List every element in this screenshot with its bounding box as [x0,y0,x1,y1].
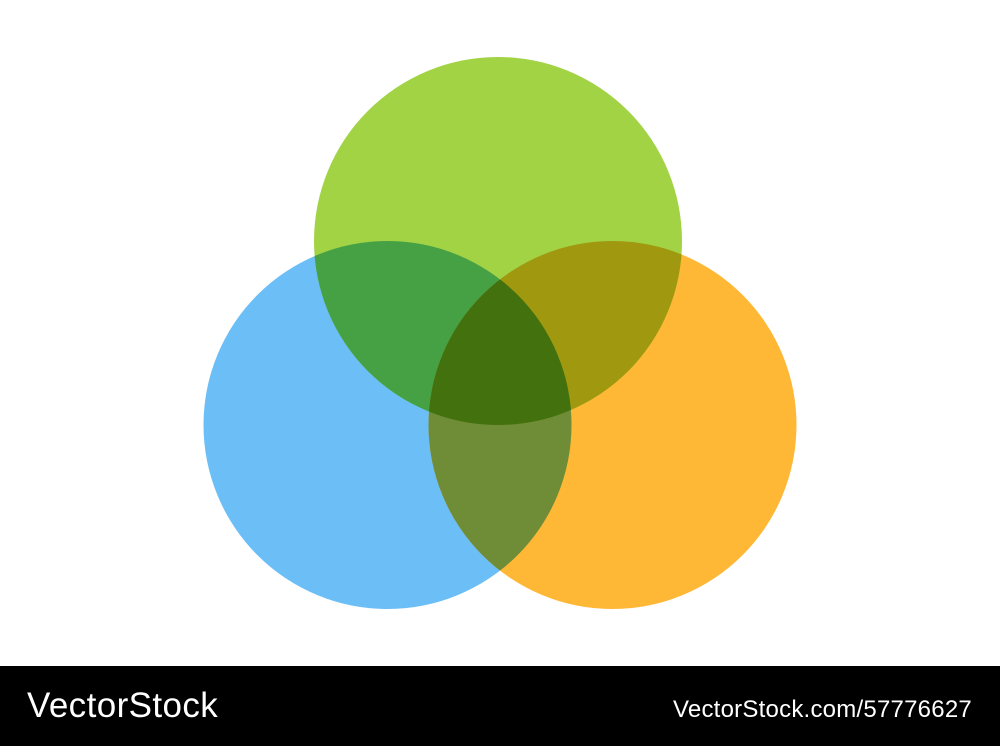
footer image reference: VectorStock.com/57776627 [673,696,972,723]
circle: green [314,57,682,425]
overlap: blue and orange [428,280,572,570]
footer bar [0,666,1000,746]
footer brand name: VectorStock [27,686,218,725]
venn diagram [204,57,796,609]
overlap: center of all three [429,280,571,425]
circle: orange [428,241,796,609]
circle: blue [204,241,572,609]
overlap: blue and green [314,241,500,412]
overlap: green and orange [429,241,682,410]
